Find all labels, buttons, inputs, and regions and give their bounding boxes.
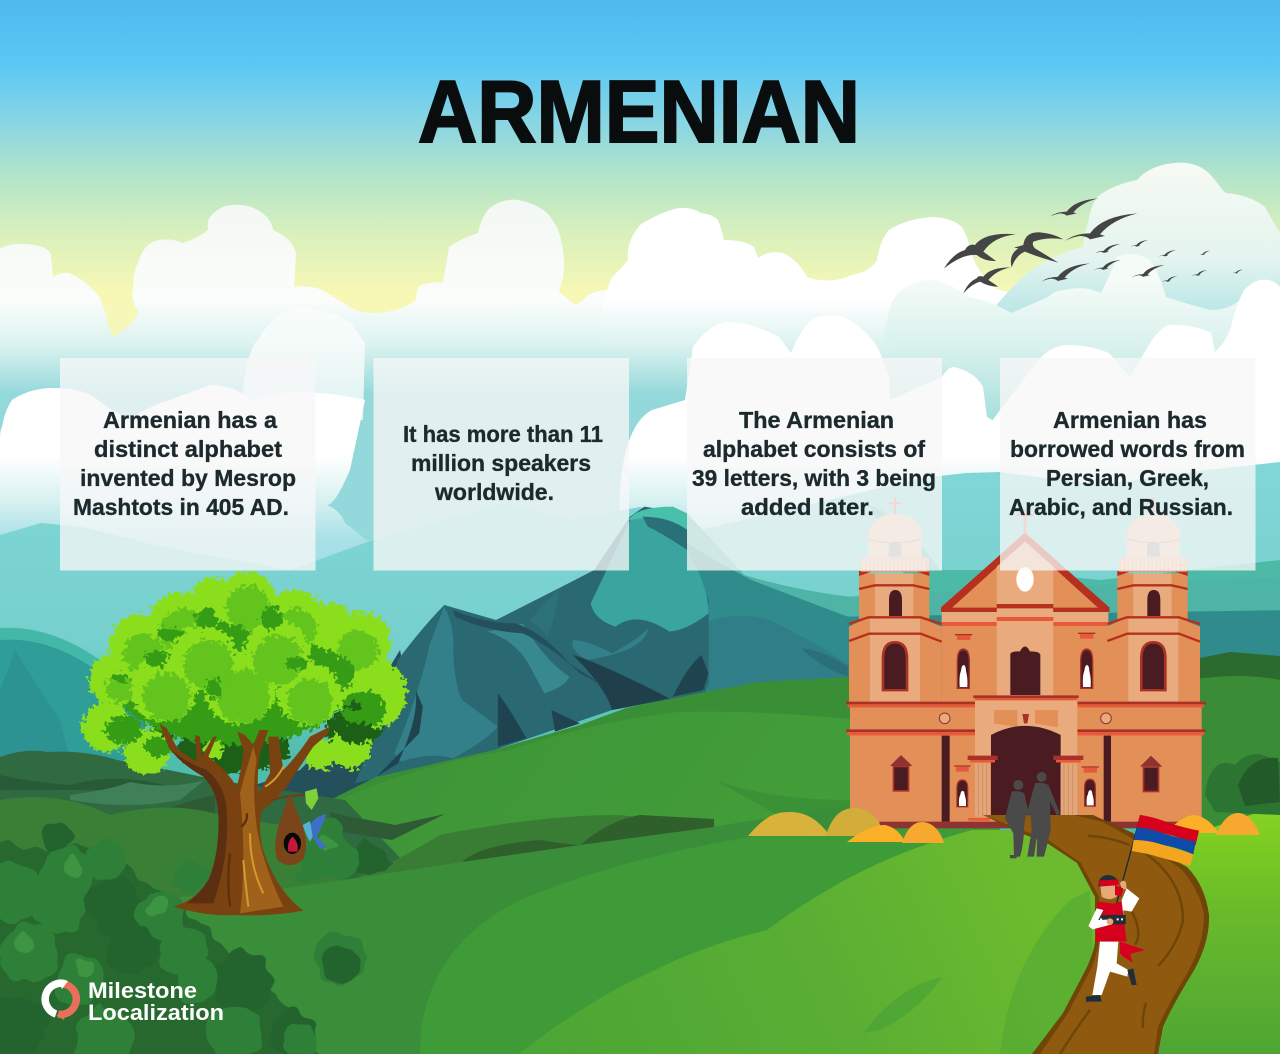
- mountains: dark slope behind tree: [210, 650, 430, 800]
- church: dark pilasters: [942, 736, 1111, 822]
- church: columns: [975, 763, 1077, 817]
- field: mid hill below tree: [0, 780, 1000, 1054]
- info panel 4: [1000, 358, 1256, 570]
- church: pediment: [941, 533, 1109, 612]
- church: centre window: [1010, 646, 1040, 695]
- arm across chest: [1088, 908, 1112, 929]
- logo wordmark: Milestone: [88, 978, 197, 1003]
- info panel 4: Persian, Greek,: [1046, 465, 1209, 491]
- foliage: outer bright tufts: [82, 572, 407, 775]
- tree: trunk and branches: [159, 723, 330, 915]
- church: bell towers: [849, 497, 942, 703]
- info panel 2: worldwide.: [434, 479, 554, 505]
- foliage: centre bright tufts: [130, 620, 340, 725]
- title: ARMENIAN: [418, 62, 860, 161]
- logo ring icon: [45, 980, 76, 1020]
- foliage: dark under-canopy: [110, 602, 382, 773]
- info panel 1: Armenian has a: [103, 407, 277, 433]
- info panel 3: [687, 358, 942, 570]
- mountains: dark central peaks: [355, 507, 709, 783]
- foliage: dark patches between tufts: [105, 657, 385, 757]
- church: side niches: [957, 648, 970, 689]
- trousers: [1092, 942, 1128, 995]
- info panel 4: Arabic, and Russian.: [1009, 494, 1233, 520]
- church: square windows: [890, 755, 912, 792]
- tree: foliage canopy: [82, 572, 407, 775]
- info panel 3: added later.: [741, 494, 874, 520]
- bushes: forest on the left: [0, 822, 347, 1054]
- hay mounds: left: [748, 808, 944, 843]
- foliage: small dark accents: [113, 607, 308, 698]
- arm raised: [1122, 888, 1139, 912]
- mountains: pale teal back range: [0, 462, 1280, 900]
- info panel 2: million speakers: [411, 450, 591, 476]
- info panel 4: Armenian has: [1053, 407, 1207, 433]
- hills: far right dark ridge: [1190, 652, 1280, 760]
- clouds: white third row centre: [619, 315, 1010, 540]
- mountains: teal left range: [0, 628, 140, 790]
- logo: Milestone Localization: Localization: [88, 1000, 224, 1025]
- clouds: pale cloud above first panel: [240, 308, 365, 420]
- birds flock: [944, 198, 1243, 293]
- clouds: white third row left: [0, 385, 373, 545]
- church: cornices: [846, 702, 1206, 732]
- foliage: shadowed lower band: [143, 704, 323, 736]
- clouds: pale second row: [850, 254, 1280, 440]
- info panel 1: invented by Mesrop: [80, 465, 296, 491]
- forest: dark green ridges on the left: [0, 751, 714, 900]
- flag pole: [1099, 815, 1141, 968]
- bushes: right of church: [1205, 754, 1280, 815]
- church: portal: [975, 698, 1077, 758]
- clouds: back row left: [0, 200, 640, 540]
- tree: blue bird: [303, 814, 327, 849]
- church: main walls: [850, 703, 1202, 823]
- field: bright foreground left of road: [518, 830, 1110, 1054]
- mountains: teal upper band right of peak: [870, 505, 1280, 630]
- sash: [1120, 942, 1145, 963]
- info panel 3: alphabet consists of: [703, 436, 925, 462]
- info panel 3: The Armenian: [739, 407, 894, 433]
- hills: main green hill: [330, 677, 1000, 900]
- clouds: back row right: [985, 163, 1280, 440]
- field: subtle shade swooshes: [590, 825, 850, 990]
- info panel 4: borrowed words from: [1010, 436, 1245, 462]
- info panel 1: [60, 358, 316, 570]
- info panel 2: It has more than 11: [403, 421, 603, 447]
- field: bright foreground right of road: [1110, 805, 1280, 1054]
- vest and body: [1098, 903, 1123, 942]
- church: [846, 497, 1206, 828]
- armenian man with flag: [1086, 815, 1199, 1002]
- tree: hanging nest: [272, 788, 318, 865]
- tree: [82, 572, 407, 915]
- church: round ornaments: [939, 713, 950, 724]
- hay mounds: right: [1165, 813, 1260, 835]
- flag: [1137, 815, 1199, 845]
- info panel 1: distinct alphabet: [94, 436, 282, 462]
- bushes: small clumps by the tree and field: [293, 822, 395, 985]
- logo: Milestone Localization: [45, 978, 224, 1025]
- shoes: [1086, 968, 1137, 1002]
- foliage: deep shadow patches: [338, 703, 375, 744]
- head: [1100, 883, 1118, 899]
- foliage: inner green of outer tufts: [106, 586, 378, 702]
- info panel 1: Mashtots in 405 AD.: [73, 494, 289, 520]
- people silhouette walking: [1005, 772, 1060, 858]
- info panel 2: [374, 358, 629, 570]
- mountains: teal right range: [687, 513, 1280, 717]
- dirt road: [983, 815, 1209, 1054]
- info panel 3: 39 letters, with 3 being: [692, 465, 936, 491]
- foliage: centre green tufts: [143, 635, 333, 724]
- clouds: back row middle white: [600, 208, 1100, 540]
- clouds: white third row right: [985, 280, 1280, 540]
